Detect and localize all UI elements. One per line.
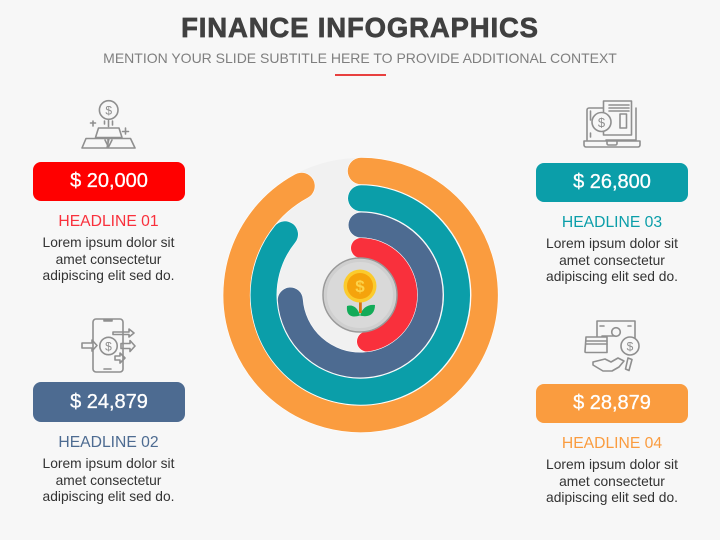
ring: red: [361, 248, 407, 342]
value box 01: [33, 162, 185, 201]
text block 01: [43, 213, 174, 283]
icon: phone with arrows: $: [105, 340, 112, 354]
icon: gold bars: $: [105, 104, 112, 118]
text block 03: adipiscing elit sed do.: [546, 269, 678, 284]
text block 02: Lorem ipsum dolor sit: [43, 456, 174, 471]
icon: money plant: [344, 270, 376, 316]
text block 03: amet consectetur: [559, 253, 665, 268]
text block 04: Lorem ipsum dolor sit: [546, 457, 678, 472]
text block 02: HEADLINE 02: [58, 434, 159, 451]
text block 03: HEADLINE 03: [562, 214, 662, 231]
value box 04: [536, 384, 688, 423]
text block 02: [43, 434, 174, 504]
text block 01: HEADLINE 01: [58, 213, 159, 230]
value box 04: $ 28,879: [573, 392, 651, 414]
panel: headline 04: [536, 384, 688, 505]
ring: teal: [264, 198, 457, 392]
text block 02: adipiscing elit sed do.: [43, 489, 174, 504]
text block 04: adipiscing elit sed do.: [546, 490, 678, 505]
subtitle: MENTION YOUR SLIDE SUBTITLE HERE TO PROVIDE ADDITIONAL CONTEXT: [103, 50, 617, 66]
text block 04: [546, 435, 678, 505]
center badge: [323, 258, 397, 332]
icon: cash, card and hand: $: [627, 340, 634, 354]
ring: orange: [237, 171, 485, 419]
icon: phone with arrows: [82, 319, 135, 372]
title accent line: [335, 74, 386, 76]
text block 04: amet consectetur: [559, 474, 665, 489]
panel: headline 02: [33, 382, 185, 504]
icon: gold bars: [82, 101, 135, 148]
text block 01: Lorem ipsum dolor sit: [43, 235, 174, 250]
value box 01: $ 20,000: [70, 170, 148, 192]
value box 02: $ 24,879: [70, 391, 148, 413]
text block 01: adipiscing elit sed do.: [43, 268, 174, 283]
icon: laptop with invoice: [584, 101, 640, 147]
icon: cash, card and hand: [585, 321, 639, 371]
text block 02: amet consectetur: [56, 473, 161, 488]
panel: headline 01: [33, 162, 185, 283]
value box 03: $ 26,800: [573, 171, 651, 193]
ring: blue: [290, 225, 430, 365]
title: FINANCE INFOGRAPHICS: [181, 12, 539, 43]
text block 01: amet consectetur: [56, 252, 161, 267]
value box 03: [536, 163, 688, 202]
text block 04: HEADLINE 04: [562, 435, 662, 452]
value box 02: [33, 382, 185, 422]
text block 03: Lorem ipsum dolor sit: [546, 236, 678, 251]
icon: money plant: $: [355, 277, 365, 296]
text block 03: [546, 214, 678, 284]
icon: laptop with invoice: $: [598, 115, 606, 130]
panel: headline 03: [536, 163, 688, 284]
radial chart: [223, 158, 497, 432]
